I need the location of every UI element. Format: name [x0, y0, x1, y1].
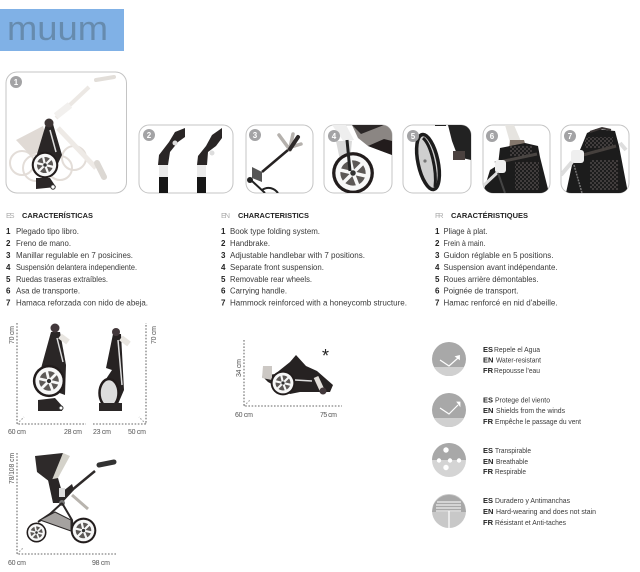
text: EN	[483, 406, 493, 415]
feature: wind shield	[432, 393, 582, 427]
text: Résistant et Anti-taches	[495, 518, 566, 527]
stroller folded side view	[33, 324, 68, 411]
text: Repele el Agua	[494, 345, 541, 354]
width labels: 60 cm	[235, 412, 253, 419]
badge 2: 2	[147, 131, 152, 140]
panel 5: removable rear wheels	[403, 125, 471, 193]
list FR: Pliage à plat.	[444, 227, 488, 236]
list EN: Hammock reinforced with a honeycomb structure.	[230, 298, 407, 308]
list EN: Adjustable handlebar with 7 positions.	[230, 251, 365, 260]
icon: breathable	[432, 443, 466, 477]
panel 3: adjustable handlebar	[246, 125, 313, 193]
width labels	[8, 429, 146, 436]
list FR: Roues arrière démontables.	[444, 275, 538, 284]
feature: breathable	[432, 443, 531, 477]
heading EN: EN	[221, 211, 230, 220]
panel 1: book type folding	[6, 72, 126, 193]
diagram: flat folded stroller dimensions	[235, 340, 342, 419]
list EN	[221, 227, 407, 308]
heading FR: CARACTÉRISTIQUES	[451, 211, 528, 220]
text	[483, 345, 542, 375]
panel 6: carrying handle	[483, 125, 550, 193]
panel 2: handbrake	[139, 125, 233, 193]
list EN: Handbrake.	[230, 239, 270, 248]
text: ES	[483, 396, 493, 404]
width labels	[235, 412, 337, 419]
text: ES	[483, 446, 493, 455]
badge 1: 1	[14, 78, 19, 87]
text: Hard-wearing and does not stain	[496, 507, 596, 516]
badge 7: 7	[568, 132, 573, 141]
list FR	[435, 227, 558, 308]
text: FR	[483, 417, 494, 426]
heading ES: CARACTERÍSTICAS	[22, 211, 93, 220]
list FR: 1	[435, 227, 440, 236]
height label left: 70 cm	[9, 326, 16, 344]
width labels	[8, 560, 110, 567]
text: EN	[483, 507, 493, 516]
text: FR	[483, 366, 494, 375]
text: EN	[483, 356, 493, 364]
badge 3: 3	[253, 131, 258, 140]
width labels: 75 cm	[320, 412, 337, 419]
text	[483, 396, 582, 426]
list ES: 1	[6, 227, 11, 236]
list FR: 5	[435, 275, 440, 284]
feature: water-resistant	[432, 342, 542, 376]
text block: FR characteristics	[435, 211, 558, 308]
height label: 34 cm	[236, 359, 243, 377]
list ES: Plegado tipo libro.	[16, 227, 79, 236]
logo: muum: muum	[7, 10, 108, 48]
list EN: 6	[221, 286, 226, 296]
list FR: Suspension avant indépendante.	[444, 263, 558, 272]
list EN: 3	[221, 251, 226, 260]
heading FR: FR	[435, 211, 444, 220]
list ES: Asa de transporte.	[16, 286, 80, 296]
text: ES	[483, 496, 493, 505]
diagram: open stroller dimensions	[8, 453, 116, 567]
width labels: 23 cm	[93, 429, 111, 436]
text: Breathable	[496, 457, 528, 466]
text: FR	[483, 467, 494, 476]
text: EN	[483, 457, 493, 466]
heading EN: CHARACTERISTICS	[238, 211, 309, 220]
list ES: 5	[6, 275, 11, 284]
feature: hard-wearing	[432, 494, 596, 528]
text: Respirable	[495, 467, 526, 476]
icon: hard-wearing	[432, 494, 466, 528]
text	[483, 446, 531, 476]
asterisk: *	[322, 346, 329, 366]
logo: muum	[0, 9, 124, 51]
width labels: 50 cm	[128, 429, 146, 436]
list ES: Freno de mano.	[16, 239, 71, 248]
list EN: 7	[221, 298, 226, 308]
list FR: Hamac renforcé en nid d'abeille.	[444, 298, 558, 308]
text: Transpirable	[495, 446, 531, 455]
list ES	[6, 227, 148, 308]
text	[483, 496, 596, 527]
stroller folded flat	[262, 355, 333, 395]
text: ES	[483, 345, 493, 354]
stroller folded front view	[99, 328, 129, 411]
list EN: 2	[221, 239, 226, 248]
panel 4: front suspension	[324, 125, 392, 194]
text: Shields from the winds	[496, 406, 565, 415]
panel 7: reinforced hammock	[561, 125, 629, 193]
list ES: Hamaca reforzada con nido de abeja.	[16, 298, 148, 308]
list ES: 4	[6, 263, 11, 272]
width labels: 60 cm	[8, 560, 26, 567]
text: Empêche le passage du vent	[495, 417, 582, 426]
list EN: Carrying handle.	[230, 286, 287, 296]
list EN: 4	[221, 263, 226, 272]
list ES: 2	[6, 239, 11, 248]
text: Protege del viento	[495, 396, 550, 404]
width labels: 98 cm	[92, 560, 110, 567]
list EN: Separate front suspension.	[230, 263, 324, 272]
text: FR	[483, 518, 494, 527]
list EN: Book type folding system.	[230, 227, 320, 236]
list EN: 5	[221, 275, 226, 284]
badge 4: 4	[332, 132, 337, 141]
height label: 78/108 cm	[9, 453, 16, 484]
width labels: 28 cm	[64, 429, 82, 436]
text block: EN characteristics	[221, 211, 407, 308]
list ES: Manillar regulable en 7 posicines.	[16, 251, 133, 260]
badge 6: 6	[490, 132, 495, 141]
width labels: 60 cm	[8, 429, 26, 436]
list ES: 7	[6, 298, 11, 308]
list FR: Poignée de transport.	[444, 286, 518, 296]
list FR: Frein à main.	[444, 239, 486, 248]
list FR: 7	[435, 298, 440, 308]
stroller open	[27, 453, 114, 543]
diagram: folded stroller dimensions, side and front	[8, 323, 158, 436]
icon: wind	[432, 393, 466, 427]
height label right: 70 cm	[151, 326, 158, 344]
list FR: Guidon réglable en 5 positions.	[444, 251, 554, 260]
list EN: 1	[221, 227, 226, 236]
list FR: 4	[435, 263, 440, 272]
list EN: Removable rear wheels.	[230, 275, 312, 284]
heading ES: ES	[6, 211, 14, 220]
badge 5: 5	[411, 132, 416, 141]
list FR: 6	[435, 286, 440, 296]
list FR: 3	[435, 251, 440, 260]
text: Duradero y Antimanchas	[495, 496, 570, 505]
icon: water repel	[432, 342, 466, 376]
list FR: 2	[435, 239, 440, 248]
text block: ES characteristics	[6, 211, 148, 308]
list ES: 3	[6, 251, 11, 260]
list ES: 6	[6, 286, 11, 296]
text: Repousse l'eau	[494, 366, 540, 375]
list ES: Suspensión delantera independiente.	[16, 263, 137, 272]
text: Water-resistant	[496, 356, 542, 364]
list ES: Ruedas traseras extraíbles.	[16, 275, 108, 284]
